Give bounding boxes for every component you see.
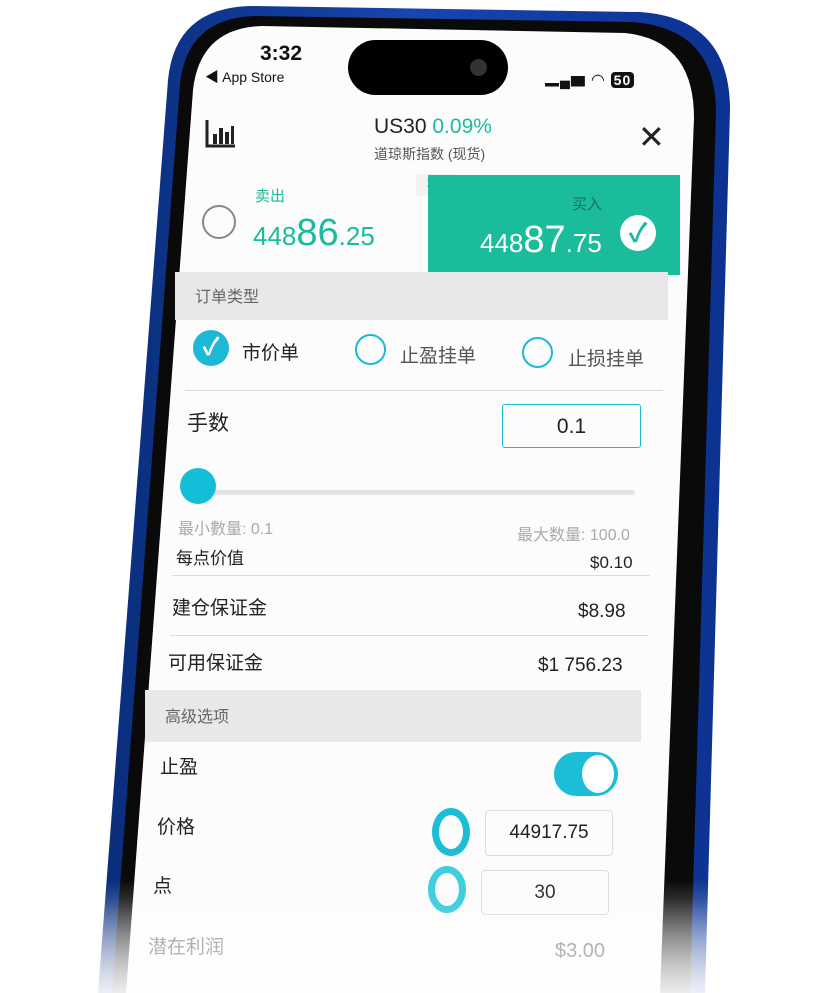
text: 点 xyxy=(153,876,172,897)
status bar xyxy=(205,42,634,90)
take profit: 止盈 xyxy=(160,757,198,778)
text: 44917.75 xyxy=(509,822,589,843)
lots: 手数 xyxy=(187,412,229,435)
section: order type: 订单类型 xyxy=(195,289,259,306)
text: $3.00 xyxy=(555,940,605,962)
status bar: ◀ App Store xyxy=(205,69,284,85)
sell/buy panel: 卖出 xyxy=(255,188,285,205)
dynamic island xyxy=(348,40,508,95)
order type options: 止盈挂单 xyxy=(400,346,476,367)
order type options xyxy=(193,330,644,370)
header: US30 0.09% xyxy=(374,115,492,138)
section: advanced: 高级选项 xyxy=(165,709,229,726)
text: 潜在利润 xyxy=(148,937,224,958)
header xyxy=(206,115,665,162)
sell/buy panel xyxy=(202,174,680,275)
text: 30 xyxy=(534,882,556,903)
status bar: ▂▄▆ ︎◠ 50 xyxy=(545,72,631,89)
text: 价格 xyxy=(157,817,195,838)
status bar: 3:32 xyxy=(260,42,302,65)
text: $0.10 xyxy=(590,553,633,572)
order type options: ✓ xyxy=(202,334,220,361)
text: 建仓保证金 xyxy=(172,598,267,619)
text: 可用保证金 xyxy=(168,653,263,674)
text: $1 756.23 xyxy=(538,655,623,676)
text: 最大数量: 100.0 xyxy=(517,527,630,544)
sell/buy panel: 1.5 xyxy=(426,174,446,190)
value rows: 每点价值 xyxy=(176,549,244,568)
sell/buy panel: ✓ xyxy=(629,218,647,248)
text: $8.98 xyxy=(578,601,626,622)
header: ✕ xyxy=(638,119,665,155)
sell/buy panel: 买入 xyxy=(572,196,602,213)
order type options: 市价单 xyxy=(242,343,299,364)
slider xyxy=(180,468,635,504)
icon: chart xyxy=(206,120,235,148)
sell/buy panel: 44886.25 xyxy=(253,212,375,254)
section: order type xyxy=(175,272,668,320)
order type options: 止损挂单 xyxy=(568,349,644,370)
section: advanced xyxy=(145,690,641,742)
sell/buy panel: 44887.75 xyxy=(480,219,602,261)
text: 0.1 xyxy=(557,415,586,438)
text: 最小數量: 0.1 xyxy=(178,521,273,538)
header: 道琼斯指数 (现货) xyxy=(374,146,485,162)
